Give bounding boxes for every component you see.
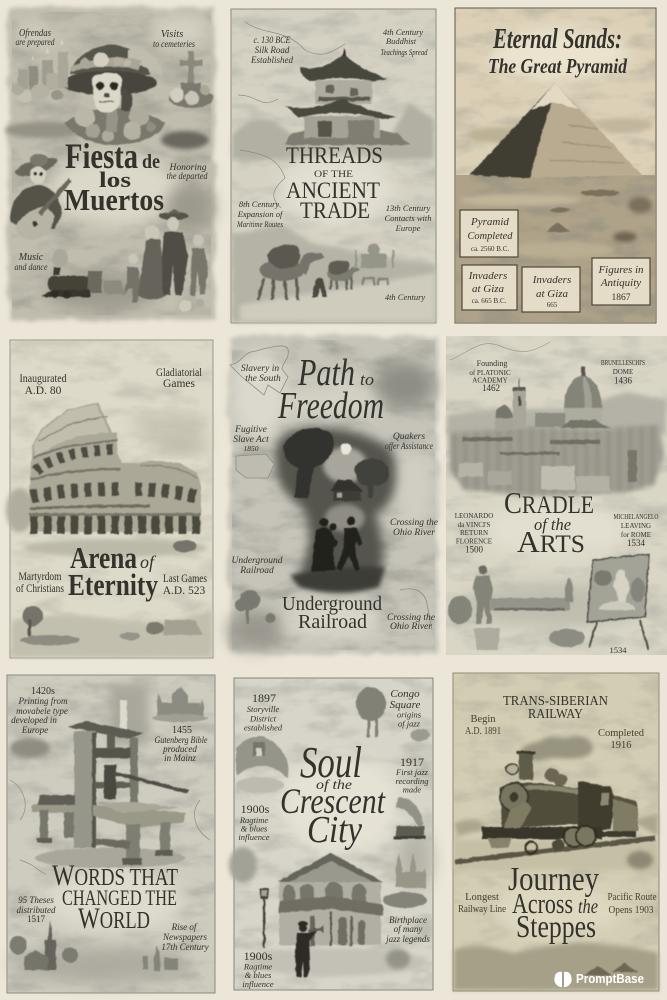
callout: 1534: 1534 — [610, 645, 627, 655]
callout box: pyramid completed: Completed — [468, 230, 513, 242]
title: TRADE — [300, 198, 370, 223]
callout: Brunelleschi: 1436 — [614, 376, 632, 386]
title: Muertos — [64, 182, 164, 217]
icon: steam locomotive — [42, 249, 126, 298]
title: Eternal Sands: — [492, 24, 622, 55]
panel: Journey Across the Steppes — [453, 673, 659, 991]
title: WORDS THAT — [52, 859, 178, 892]
callout: fugitive slave act: Slave Act — [233, 435, 269, 445]
callout: Leonardo: 1500 — [465, 544, 484, 554]
icon: town skyline — [143, 945, 178, 971]
icon: bottom left trees — [235, 590, 275, 624]
callout box: figures in antiquity — [592, 258, 650, 305]
callout: newspapers: Newspapers — [162, 932, 207, 942]
title: CHANGED THE — [62, 885, 177, 910]
watermark: PromptBase — [554, 971, 644, 987]
title: of — [140, 552, 157, 572]
icon: map outlines — [230, 346, 432, 630]
subtitle — [282, 593, 382, 633]
title — [504, 485, 594, 559]
icon: calavera with flowered hat — [61, 45, 165, 145]
icon: pagoda — [285, 48, 410, 145]
panel 4 wash and frame — [6, 340, 213, 658]
callout: 1420s: Europe — [21, 725, 48, 735]
icon: Birth of Venus painting — [587, 554, 649, 650]
callout: honoring: the departed — [166, 172, 208, 182]
callout box: figures in antiquity: Antiquity — [600, 277, 641, 289]
callout: 1900s upper: & blues — [241, 824, 268, 834]
callout: maritime routes: Maritime Routes — [236, 219, 284, 229]
callout: inaugurated: A.D. 80 — [25, 385, 62, 397]
icon: candles and pumpkins — [12, 38, 68, 103]
icon: domed palace — [355, 244, 394, 268]
title: The Great Pyramid — [488, 54, 627, 78]
callout: Congo Square: origins — [397, 710, 422, 720]
callout: ofrendas: Ofrendas — [19, 27, 51, 39]
heading: TRANS-SIBERIAN — [503, 693, 608, 708]
title: to — [360, 370, 374, 389]
title — [488, 24, 627, 78]
callout: 1420s: developed in — [11, 715, 57, 725]
title — [508, 861, 599, 944]
callout: Michelangelo: for ROME — [621, 531, 651, 539]
callout: fugitive slave act: 1850 — [244, 444, 259, 453]
callout: maritime routes: Expansion of — [237, 209, 284, 219]
title: Fiesta — [65, 136, 138, 176]
callout: pacific route: Pacific Route — [608, 892, 657, 903]
callout box: invaders at Giza: at Giza — [472, 283, 505, 295]
callout: birthplace: Birthplace — [389, 915, 427, 925]
title: de — [142, 151, 160, 173]
icon: Florence cityscape — [449, 425, 664, 496]
panel: Fiesta de los Muertos — [5, 7, 215, 320]
callout: longest railway: Longest — [465, 892, 499, 903]
callout box: figures in antiquity: Figures in — [597, 264, 644, 276]
callout box: pyramid completed: Pyramid — [470, 216, 509, 228]
callout: begin: A.D. 1891 — [465, 726, 501, 737]
callout: 95 Theses: 95 Theses — [18, 895, 54, 905]
callout: crossing Ohio: Crossing the — [390, 518, 438, 528]
callout: inaugurated: Inaugurated — [20, 373, 67, 385]
callout: 1917: First jazz — [395, 767, 429, 777]
callout: 1455: in Mainz — [164, 753, 196, 763]
callout: slavery: the South — [245, 374, 281, 384]
icon: cottage — [330, 480, 363, 501]
panel 1 wash — [5, 7, 215, 320]
callout: 1420s: 1420s — [31, 686, 55, 697]
callout: 1917: made — [403, 784, 421, 794]
callout: birthplace: jazz legends — [385, 934, 430, 944]
callout: gladiatorial games: Gladiatorial — [156, 367, 202, 379]
panel: Words that Changed the World — [7, 675, 215, 993]
callout: Platonic Academy: of PLATONIC — [469, 369, 511, 377]
callout: Congo Square: Congo — [390, 688, 420, 700]
title: Eternity — [68, 567, 158, 602]
icon: camel caravan — [258, 244, 388, 300]
title: Across — [512, 888, 573, 920]
icon: David statue — [473, 565, 500, 650]
panel 6 wash — [446, 336, 667, 655]
icon: background tree left — [229, 847, 257, 883]
callout: 1900s lower: Ragtime — [243, 962, 272, 972]
callout box: invaders at Giza: ca. 665 B.C. — [472, 297, 507, 305]
callout: slavery: Slavery in — [241, 364, 279, 374]
callout box: pyramid completed — [460, 210, 518, 257]
icon: fleeing family — [311, 517, 362, 572]
callout: music: and dance — [14, 262, 48, 272]
title: Arena — [70, 540, 137, 575]
icon: colosseum — [29, 402, 201, 532]
icon: trumpet player — [295, 921, 324, 977]
callout: Brunelleschi: DOME — [613, 368, 633, 376]
panel 8 wash and frame — [234, 678, 433, 990]
icon: cross and flowers — [169, 51, 213, 108]
callout: gladiatorial games: Games — [163, 378, 195, 390]
callout: 95 Theses: 1517 — [27, 914, 46, 924]
callout: 1917: 1917 — [400, 755, 424, 769]
icon: steam locomotive — [455, 736, 655, 862]
title: Freedom — [277, 385, 384, 427]
callout: Congo Square: Square — [390, 699, 420, 711]
callout: completed: Completed — [598, 728, 645, 739]
callout: 1420s: Printing from — [18, 696, 68, 706]
callout: underground railroad: Railroad — [239, 566, 274, 576]
callout: 1897: 1897 — [252, 691, 276, 705]
panel: Arena of Eternity — [6, 340, 213, 658]
title: Journey — [508, 861, 599, 898]
callout: Leonardo: da VINCI'S — [458, 521, 491, 529]
icon: church — [9, 920, 78, 970]
callout box: invaders at Giza 665: at Giza — [536, 288, 569, 300]
panel: Eternal Sands — [455, 8, 656, 323]
title: Soul — [300, 738, 362, 787]
callout: Congo Square: of jazz — [398, 718, 421, 728]
icon: gramophone — [394, 798, 426, 839]
callout: Leonardo: FLORENCE — [456, 538, 492, 546]
callout box: figures in antiquity: 1867 — [612, 293, 631, 303]
panel 7 wash and frame — [7, 675, 215, 993]
callout: ofrendas: are prepared — [16, 37, 55, 47]
callout: silk road: Established — [250, 55, 293, 65]
title: CRADLE — [504, 485, 594, 520]
callout: visits: to cemeteries — [153, 39, 195, 49]
callout: crossing Ohio lower: Crossing the — [387, 613, 435, 623]
callout box: invaders at Giza 665: Invaders — [532, 274, 571, 286]
panel 3 wash and frame — [455, 8, 656, 323]
icon: moon and trees — [284, 428, 389, 498]
icon: stone bridge — [236, 736, 288, 793]
callout: martyrdom: Martyrdom — [18, 571, 62, 583]
title: Crescent — [280, 781, 386, 821]
callout: Leonardo: LEONARDO — [455, 512, 493, 520]
subtitle: Railroad — [298, 611, 367, 633]
callout: Platonic Academy: Founding — [477, 359, 507, 368]
callout: silk road: c. 130 BCE — [254, 35, 291, 45]
callout: 1900s lower: 1900s — [244, 949, 273, 963]
icon: printing press — [32, 721, 188, 868]
title — [277, 352, 384, 427]
panel 5 wash — [227, 336, 438, 654]
title: WORLD — [78, 902, 150, 935]
callout: contacts with Europe: Contacts with — [384, 213, 432, 223]
callout: 1897: Storyville — [247, 704, 280, 714]
panel: Threads of the Ancient Trade — [231, 9, 436, 323]
title: Path — [297, 352, 355, 394]
callout: martyrdom: of Christians — [16, 583, 64, 595]
callout: underground railroad: Underground — [231, 556, 283, 566]
subtitle: Underground — [282, 593, 382, 615]
panel: Soul of the Crescent City — [229, 678, 433, 990]
icon: night clearing — [275, 428, 396, 592]
callout: 1897: District — [249, 714, 277, 724]
callout: honoring: Honoring — [169, 163, 207, 173]
callout: 1900s upper: Ragtime — [239, 815, 268, 825]
title — [52, 859, 178, 935]
title: of the — [316, 778, 352, 793]
callout: completed: 1916 — [610, 740, 632, 751]
icon: oak trees — [356, 687, 430, 741]
icon: cathedral dome — [495, 367, 610, 430]
title — [286, 143, 383, 223]
callout box: pyramid completed: ca. 2560 B.C. — [471, 245, 509, 253]
icon: castle skyline — [152, 687, 208, 722]
callout: contacts with Europe: 13th Century — [386, 203, 431, 213]
callout: birthplace: of many — [394, 924, 422, 934]
title — [64, 136, 164, 217]
callout: last games: A.D. 523 — [163, 585, 205, 597]
callout: begin: Begin — [470, 714, 496, 725]
title: THREADS — [286, 143, 383, 168]
icon: skeleton family — [122, 209, 208, 312]
callout box: invaders at Giza 665: 665 — [547, 301, 558, 309]
callout: visits: Visits — [161, 29, 183, 40]
panel 9 wash and frame — [453, 673, 659, 991]
heading: RAILWAY — [528, 706, 583, 721]
callout: newspapers: Rise of — [171, 922, 198, 932]
icon: river and bridge — [448, 578, 585, 647]
callout box: invaders at Giza — [462, 265, 517, 310]
callout: Michelangelo: 1534 — [627, 538, 646, 548]
callout: last games: Last Games — [163, 573, 207, 585]
title: OF THE — [314, 170, 353, 180]
callout box: invaders at Giza: Invaders — [468, 270, 507, 282]
callout: 1420s: movabele type — [16, 706, 68, 716]
callout: newspapers: 17th Century — [161, 942, 209, 952]
callout: 4th century: 4th Century — [385, 292, 425, 302]
callout: buddhist teachings: Teachings Spread — [380, 47, 428, 57]
callout box: invaders at Giza 665 — [522, 267, 580, 312]
title: of the — [534, 515, 571, 534]
title — [280, 738, 386, 851]
panel: Path to Freedom — [227, 336, 438, 654]
icon: balcony house — [277, 853, 383, 946]
callout: 1917: recording — [396, 776, 428, 786]
callout: pacific route: Opens 1903 — [608, 905, 654, 916]
callout: buddhist teachings: Buddhist — [386, 36, 417, 46]
callout: 1900s lower: influence — [242, 979, 274, 989]
callout: 1900s upper: 1900s — [241, 802, 270, 816]
callout: contacts with Europe: Europe — [395, 223, 421, 233]
callout: Leonardo: RETURN — [460, 529, 488, 537]
title: ANCIENT — [286, 178, 380, 203]
heading — [503, 693, 608, 721]
title: City — [307, 809, 362, 851]
callout: Platonic Academy: ACADEMY — [472, 376, 508, 384]
callout: silk road: Silk Road — [255, 45, 290, 55]
callout: 1455: Gutenberg Bible — [154, 735, 208, 745]
callout: music: Music — [18, 252, 44, 263]
title — [68, 540, 158, 602]
callout: quakers: offer Assistance — [385, 441, 433, 452]
panel: Cradle of the Arts — [446, 336, 667, 655]
icon: great pyramid — [470, 83, 642, 178]
icon: street lamp — [259, 888, 269, 948]
callout: 95 Theses: distributed — [16, 905, 56, 915]
callout: Brunelleschi: BRUNELLESCHI'S — [601, 359, 645, 367]
icon: bottom landscape — [20, 540, 203, 645]
callout: fugitive slave act: Fugitive — [234, 425, 267, 435]
panel 2 wash and frame — [231, 9, 436, 323]
callout: Michelangelo: LEAVING — [621, 522, 651, 530]
callout: 1455: produced — [162, 744, 197, 754]
title: los — [99, 167, 132, 192]
callout: 1900s lower: & blues — [245, 970, 272, 980]
callout: maritime routes: 8th Century — [239, 199, 279, 209]
watermark: PromptBase: PromptBase — [576, 971, 644, 986]
callout: crossing Ohio lower: Ohio River — [390, 622, 432, 632]
title: ARTS — [517, 524, 585, 559]
icon: shrub — [386, 949, 410, 969]
callout: buddhist teachings: 4th Century — [383, 27, 423, 37]
callout: 1455: 1455 — [172, 725, 192, 736]
title: the — [578, 896, 598, 918]
callout: Platonic Academy: 1462 — [482, 383, 500, 393]
title: Steppes — [516, 908, 596, 944]
callout: longest railway: Railway Line — [458, 904, 506, 915]
callout: quakers: Quakers — [393, 432, 425, 442]
icon: cathedral — [383, 853, 427, 908]
icon: skeleton guitarist — [10, 154, 70, 240]
callout: 1900s upper: influence — [238, 832, 270, 842]
callout: 1897: established — [244, 722, 283, 732]
callout: crossing Ohio: Ohio River — [393, 528, 435, 538]
